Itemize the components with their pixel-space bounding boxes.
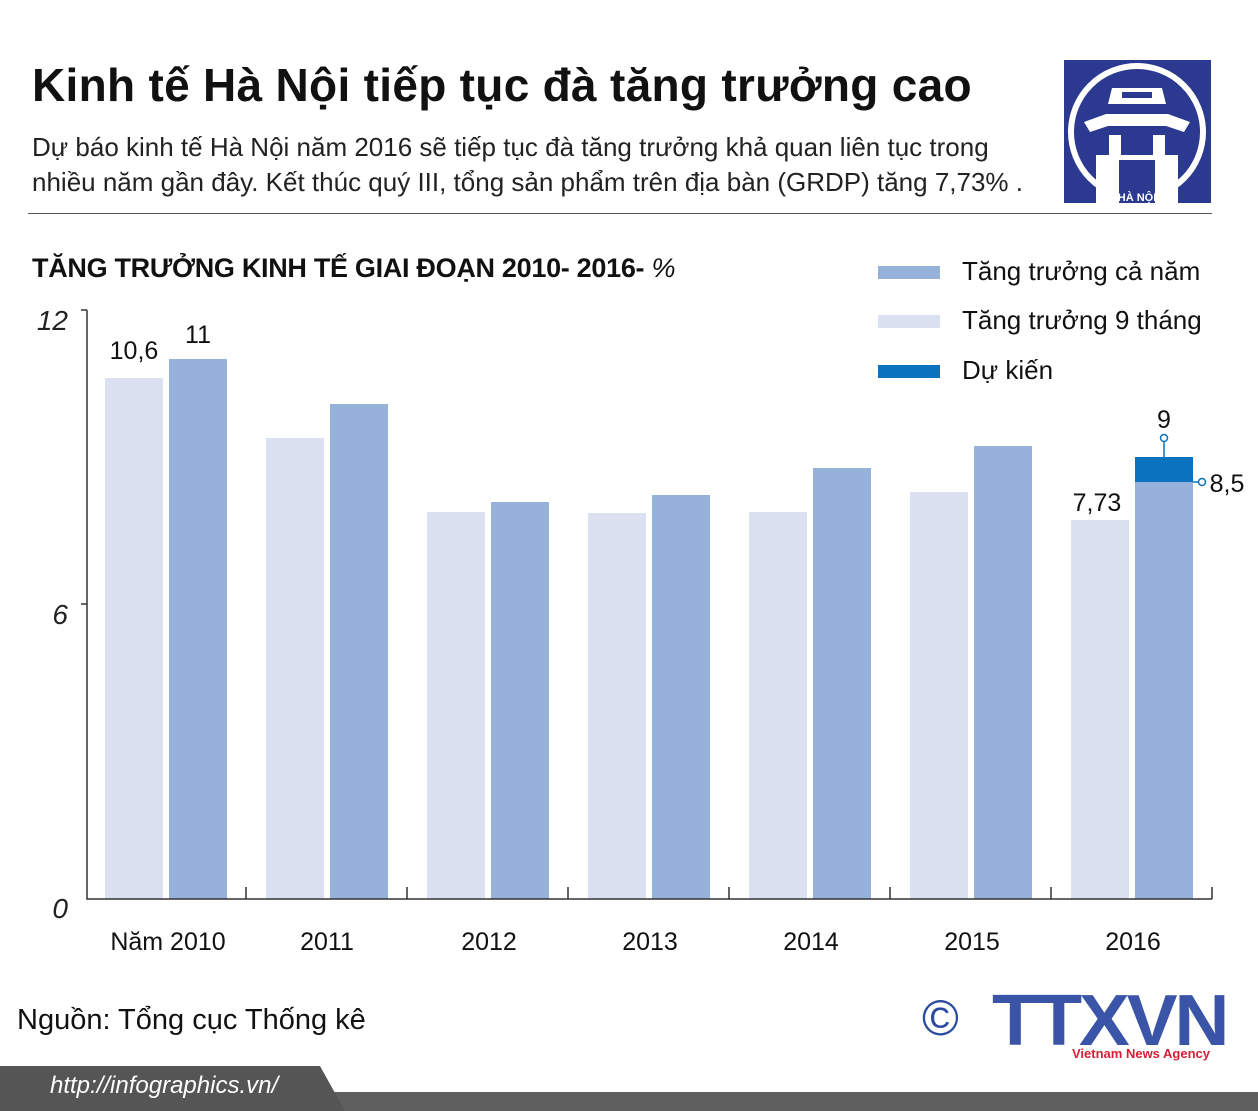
bar chart: 2013 xyxy=(622,928,678,956)
bar chart xyxy=(37,305,1244,956)
bar chart: 10,6 xyxy=(110,337,158,365)
bar chart: 0 xyxy=(52,893,68,924)
bar chart: 8,5 xyxy=(1210,470,1244,498)
TTXVN logo: TTXVN xyxy=(992,981,1226,1061)
bar chart: 7,73 xyxy=(1073,489,1121,517)
legend: Tăng trưởng cả năm xyxy=(962,256,1200,286)
title: Kinh tế Hà Nội tiếp tục đà tăng trưởng cao xyxy=(32,59,972,111)
legend: Dự kiến xyxy=(962,355,1053,385)
legend xyxy=(878,256,1202,385)
bar chart: Năm 2010 xyxy=(110,928,226,956)
icon: copyright: © xyxy=(922,990,959,1046)
icon: Ha Noi logo xyxy=(1064,60,1211,203)
TTXVN logo: Vietnam News Agency xyxy=(1072,1046,1210,1061)
bar chart: 2012 xyxy=(461,928,517,956)
bar chart: 12 xyxy=(37,305,68,336)
text: http://infographics.vn/ xyxy=(50,1072,278,1099)
bar chart: 11 xyxy=(185,321,211,349)
bar chart: 2014 xyxy=(783,928,839,956)
footer url tab xyxy=(0,1066,345,1111)
bar chart: 2011 xyxy=(300,928,354,956)
chart title: TĂNG TRƯỞNG KINH TẾ GIAI ĐOẠN 2010- 2016- % xyxy=(32,253,675,283)
bar chart: 6 xyxy=(52,599,68,630)
footer bar xyxy=(0,1092,1258,1111)
bar chart: 9 xyxy=(1157,406,1171,434)
bar chart: 2016 xyxy=(1105,928,1161,956)
divider xyxy=(28,213,1212,214)
subtitle text: Dự báo kinh tế Hà Nội năm 2016 sẽ tiếp tục đà tăng trưởng khả quan liên tục trong nhiều năm gần đây. Kết thúc quý III, tổng sản phẩm trên địa bàn (GRDP) tăng 7,73% . xyxy=(32,132,1023,197)
legend: Tăng trưởng 9 tháng xyxy=(962,305,1202,335)
source: Nguồn: Tổng cục Thống kê xyxy=(17,1004,366,1036)
bar chart: 2015 xyxy=(944,928,1000,956)
